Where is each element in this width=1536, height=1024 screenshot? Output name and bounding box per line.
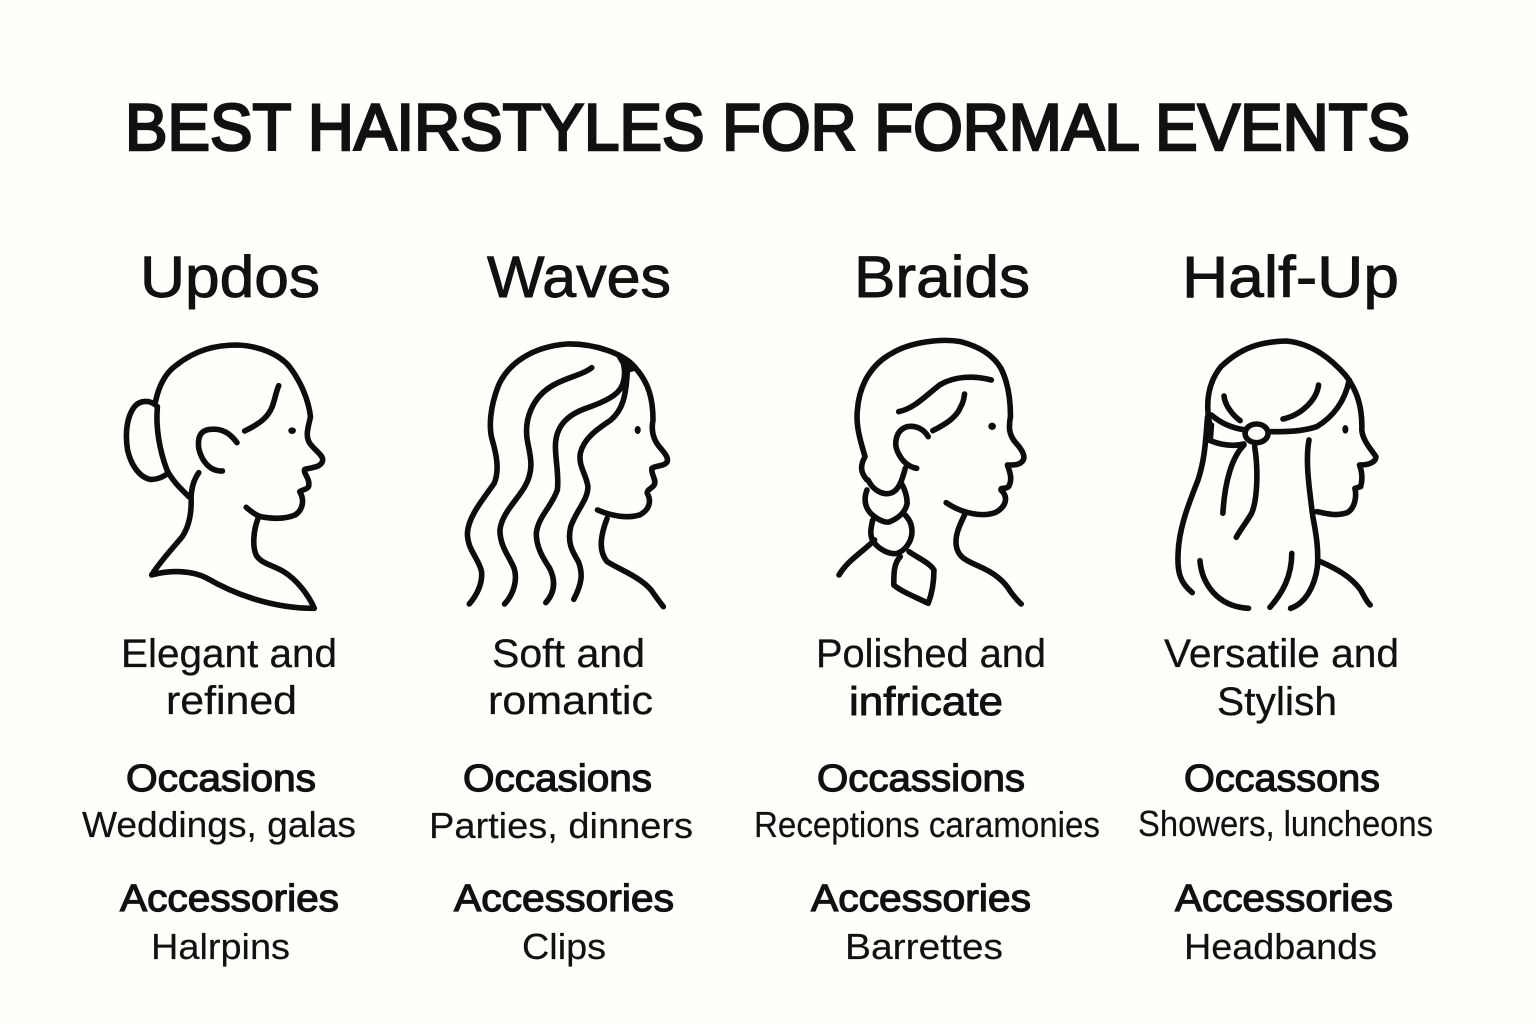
icon: half-up hair profile [1178,341,1376,608]
occasions: Occasions [463,758,652,800]
description [121,632,337,723]
description: Elegant and [121,632,337,676]
accessories: Headbands [1184,926,1377,967]
description: infricate [849,680,1003,724]
accessories: Clips [522,926,606,967]
heading: Waves: Waves [487,245,671,310]
title: BEST HAIRSTYLES FOR FORMAL EVENTS [125,90,1410,164]
occasions: Showers, luncheons [1138,803,1433,844]
panel: Braids [754,245,1100,967]
description: Stylish [1217,680,1337,724]
icon: updo profile [126,345,323,608]
heading: Braids: Braids [854,245,1030,310]
occasions: Occasions [126,758,316,800]
description: refined [166,679,297,723]
occasions [429,758,693,846]
accessories [454,878,674,967]
description [816,632,1046,724]
accessories: Accessories [811,878,1031,920]
accessories: Halrpins [151,926,290,967]
panel: Half-Up [1138,245,1433,967]
occasions [754,758,1100,845]
occasions: Occassions [817,758,1025,800]
description [488,632,653,723]
accessories: Accessories [454,878,674,920]
panel: Updos [82,245,356,967]
description: Soft and [492,632,645,676]
occasions [82,758,356,845]
description [1164,632,1399,724]
description: romantic [488,679,653,723]
description: Polished and [816,632,1046,676]
occasions: Occassons [1184,758,1380,800]
accessories: Accessories [120,878,339,920]
heading: Half-Up: Half-Up [1182,245,1399,310]
occasions: Receptions caramonies [754,804,1100,845]
heading: Updos: Updos [140,245,320,310]
accessories [1175,878,1393,967]
panel: Waves [429,245,693,967]
occasions: Weddings, galas [82,804,356,845]
icon: braided hair profile [839,340,1024,604]
accessories [811,878,1031,967]
description: Versatile and [1164,632,1399,676]
occasions: Parties, dinners [429,805,693,846]
accessories [120,878,339,967]
icon: wavy hair profile [467,344,667,607]
occasions [1138,758,1433,844]
accessories: Barrettes [845,926,1003,967]
accessories: Accessories [1175,878,1393,920]
